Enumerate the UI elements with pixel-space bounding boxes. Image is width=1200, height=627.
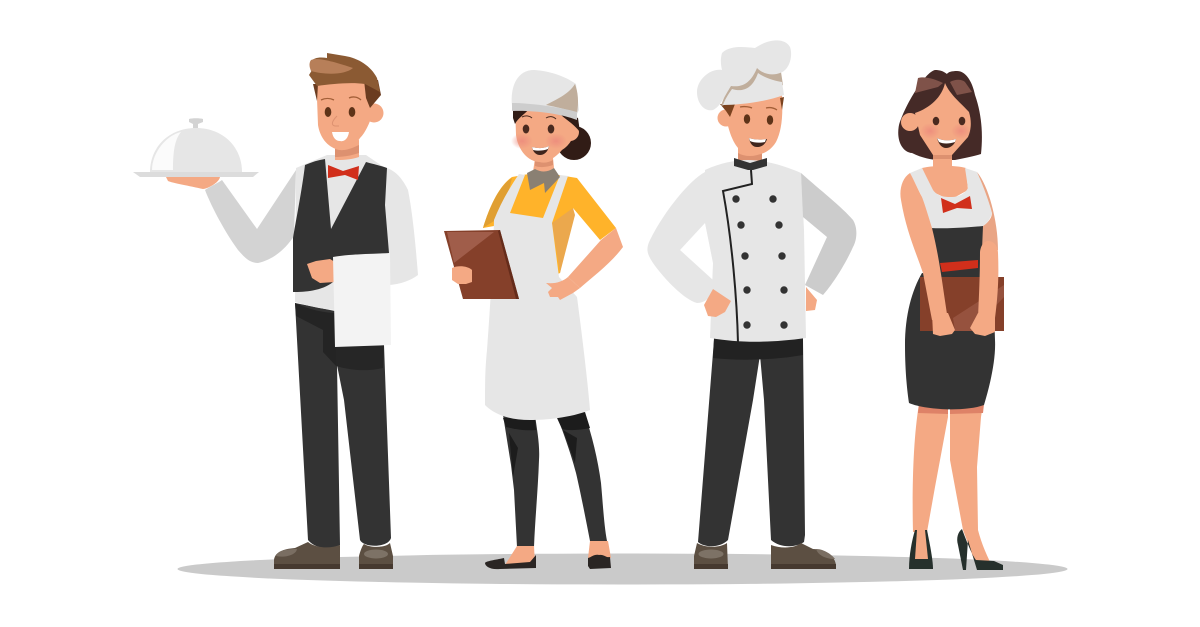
cook apron: [485, 174, 590, 420]
waiter bow tie: [328, 165, 359, 180]
waiter: [133, 53, 418, 569]
waitress legs: [913, 404, 990, 562]
waiter vest: [293, 159, 389, 292]
waiter trousers: [295, 303, 391, 548]
cook with apron: [444, 70, 623, 569]
chef jacket body: [705, 160, 806, 342]
waitress head: [898, 70, 982, 170]
chef right arm: [801, 173, 856, 295]
waitress bow: [941, 196, 972, 213]
waitress shoes: [909, 529, 1003, 570]
cook shirt: [483, 172, 616, 300]
waiter shirt: [295, 155, 389, 310]
chef shoes: [694, 543, 836, 569]
clipboard: [444, 230, 519, 299]
waiter head: [309, 53, 384, 160]
waiter hand: [307, 259, 335, 283]
chef trousers: [698, 338, 805, 546]
chef hands: [704, 287, 817, 317]
chef: [647, 40, 856, 569]
chef buttons: [732, 195, 788, 329]
cook feet and shoes: [485, 541, 611, 569]
napkin: [333, 253, 391, 347]
waitress arms: [900, 172, 998, 320]
waiter shoes: [274, 542, 393, 569]
cook leggings: [503, 412, 607, 547]
cook collar: [527, 168, 560, 193]
waiter hand under tray: [166, 177, 220, 189]
chef placket: [723, 170, 752, 343]
waiter left sleeve: [380, 168, 418, 285]
waitress clipboard: [920, 277, 1004, 331]
waiter right arm: [205, 170, 296, 263]
chef hat: [697, 40, 791, 110]
cook neck: [533, 158, 554, 176]
cook head: [511, 104, 591, 167]
cook hat: [512, 70, 579, 120]
waitress torso and skirt: [905, 226, 995, 409]
cook arm on hip: [546, 228, 623, 300]
chef left arm: [647, 172, 713, 303]
waitress chest skin: [922, 166, 968, 200]
cloche and tray: [133, 118, 259, 177]
waitress top: [910, 168, 992, 228]
cook hand on clipboard: [452, 266, 472, 284]
chef collar: [734, 158, 767, 170]
ground shadow: [178, 554, 1068, 584]
waitress hands: [932, 313, 995, 336]
chef neck and head: [718, 95, 784, 162]
waitress: [898, 70, 1004, 570]
